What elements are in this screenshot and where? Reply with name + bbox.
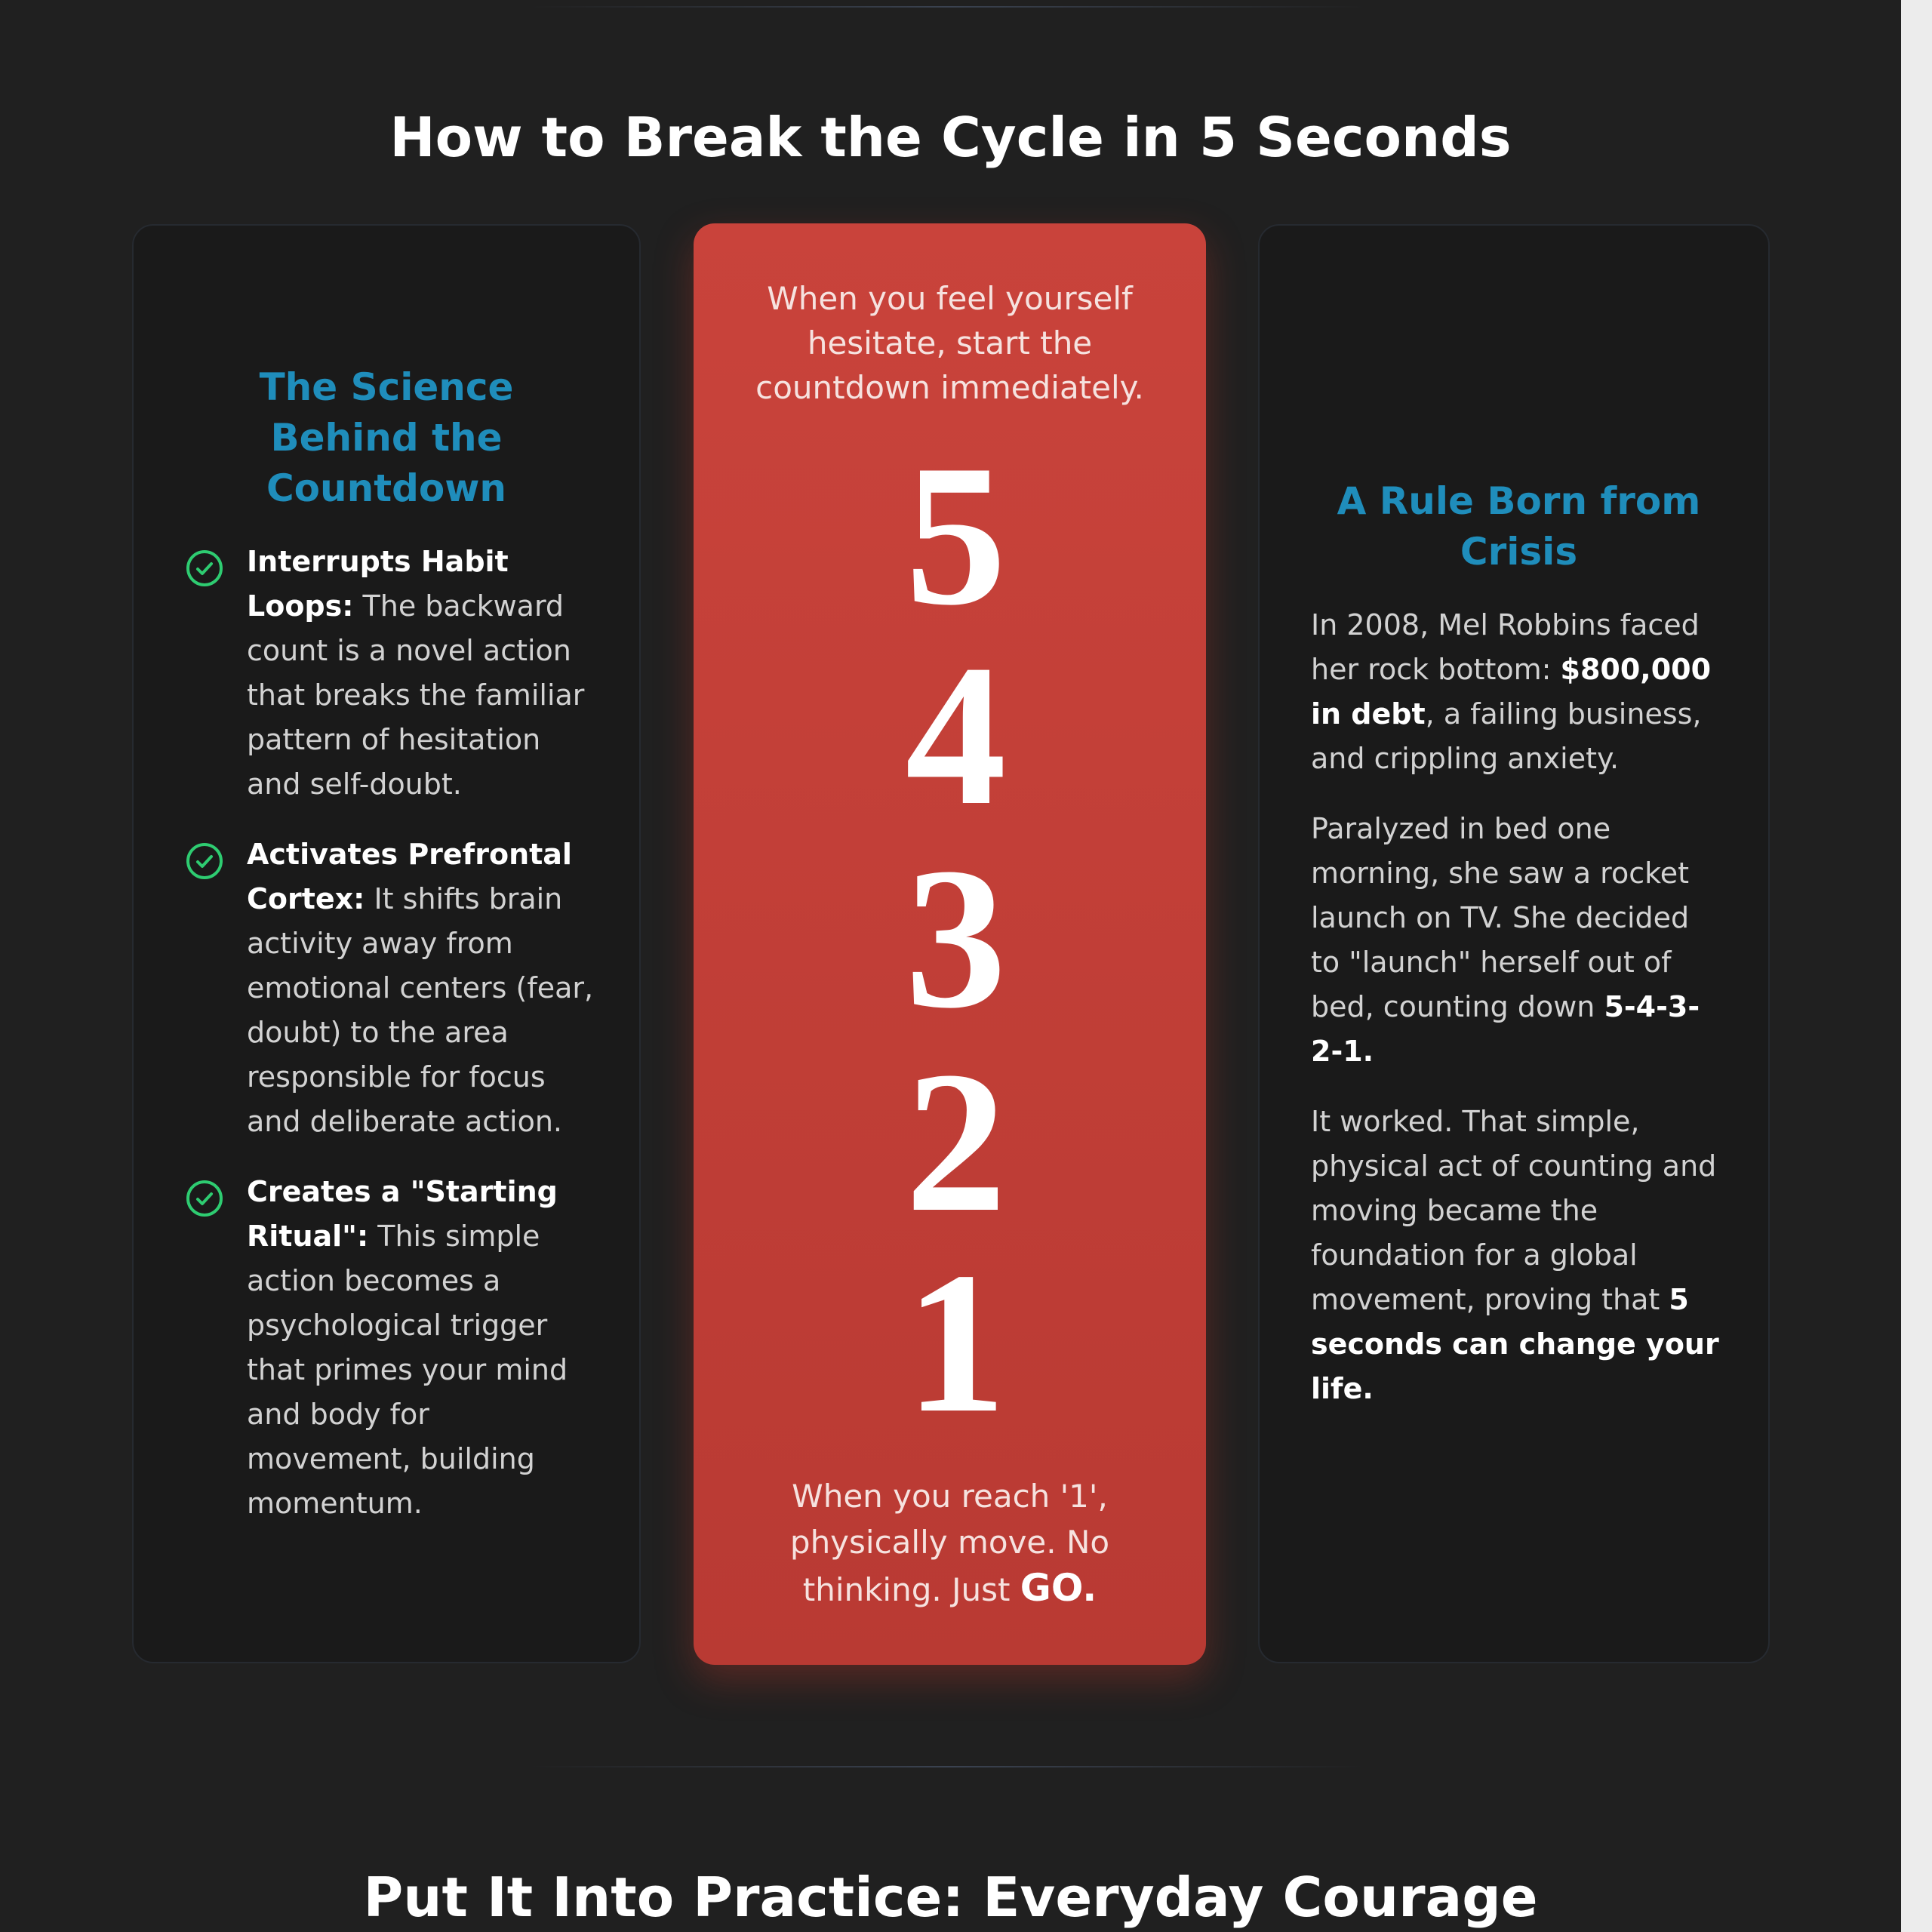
bottom text xyxy=(790,1478,1109,1610)
paragraphs: Paralyzed in bed one morning, she saw a rocket launch on TV. She decided to "launch" herself out of bed, counting down 5-4-3-2-1. xyxy=(1311,812,1700,1068)
heading: science: Behind the xyxy=(271,415,502,459)
top text: hesitate, start the xyxy=(808,325,1092,361)
digits: 1 xyxy=(906,1230,1007,1454)
top text: countdown immediately. xyxy=(755,369,1144,406)
panel: science xyxy=(132,224,641,1663)
paragraphs: In 2008, Mel Robbins faced her rock bottom: $800,000 in debt, a failing business, and crippling anxiety. xyxy=(1311,608,1711,775)
bottom text: thinking. Just GO. xyxy=(803,1566,1097,1610)
item 3: Creates a "Starting Ritual": This simple action becomes a psychological trigger that primes your mind and body for movement, building momentum. xyxy=(247,1174,568,1520)
heading: science: Countdown xyxy=(266,466,506,510)
title: How to Break the Cycle in 5 Seconds xyxy=(389,106,1512,169)
heading: science: The Science xyxy=(260,365,513,409)
heading: origin xyxy=(1337,479,1700,574)
heading: origin: A Rule Born from xyxy=(1337,479,1700,523)
heading: science xyxy=(260,365,513,510)
paragraphs: It worked. That simple, physical act of counting and moving became the foundation for a global movement, proving that 5 seconds can change your life. xyxy=(1311,1105,1719,1405)
title: practice: Put It Into Practice: Everyday Courage xyxy=(363,1866,1538,1929)
bottom text: When you reach '1', xyxy=(792,1478,1108,1515)
digits: 2 xyxy=(906,1029,1007,1254)
top text xyxy=(755,280,1144,406)
item 2: Activates Prefrontal Cortex: It shifts brain activity away from emotional centers (fear, doubt) to the area responsible for focus and deliberate action. xyxy=(247,838,593,1138)
heading: origin: Crisis xyxy=(1460,530,1577,574)
panel: countdown xyxy=(694,223,1206,1665)
panel: origin xyxy=(1258,224,1770,1663)
digits xyxy=(906,423,1007,1454)
digits: 3 xyxy=(906,826,1007,1050)
top text: When you feel yourself xyxy=(767,280,1133,317)
bottom text: physically move. No xyxy=(790,1524,1109,1561)
digits: 4 xyxy=(906,623,1007,847)
digits: 5 xyxy=(906,423,1007,647)
paragraphs xyxy=(1311,608,1719,1405)
item 1: Interrupts Habit Loops: The backward count is a novel action that breaks the familiar pattern of hesitation and self-doubt. xyxy=(247,545,584,800)
